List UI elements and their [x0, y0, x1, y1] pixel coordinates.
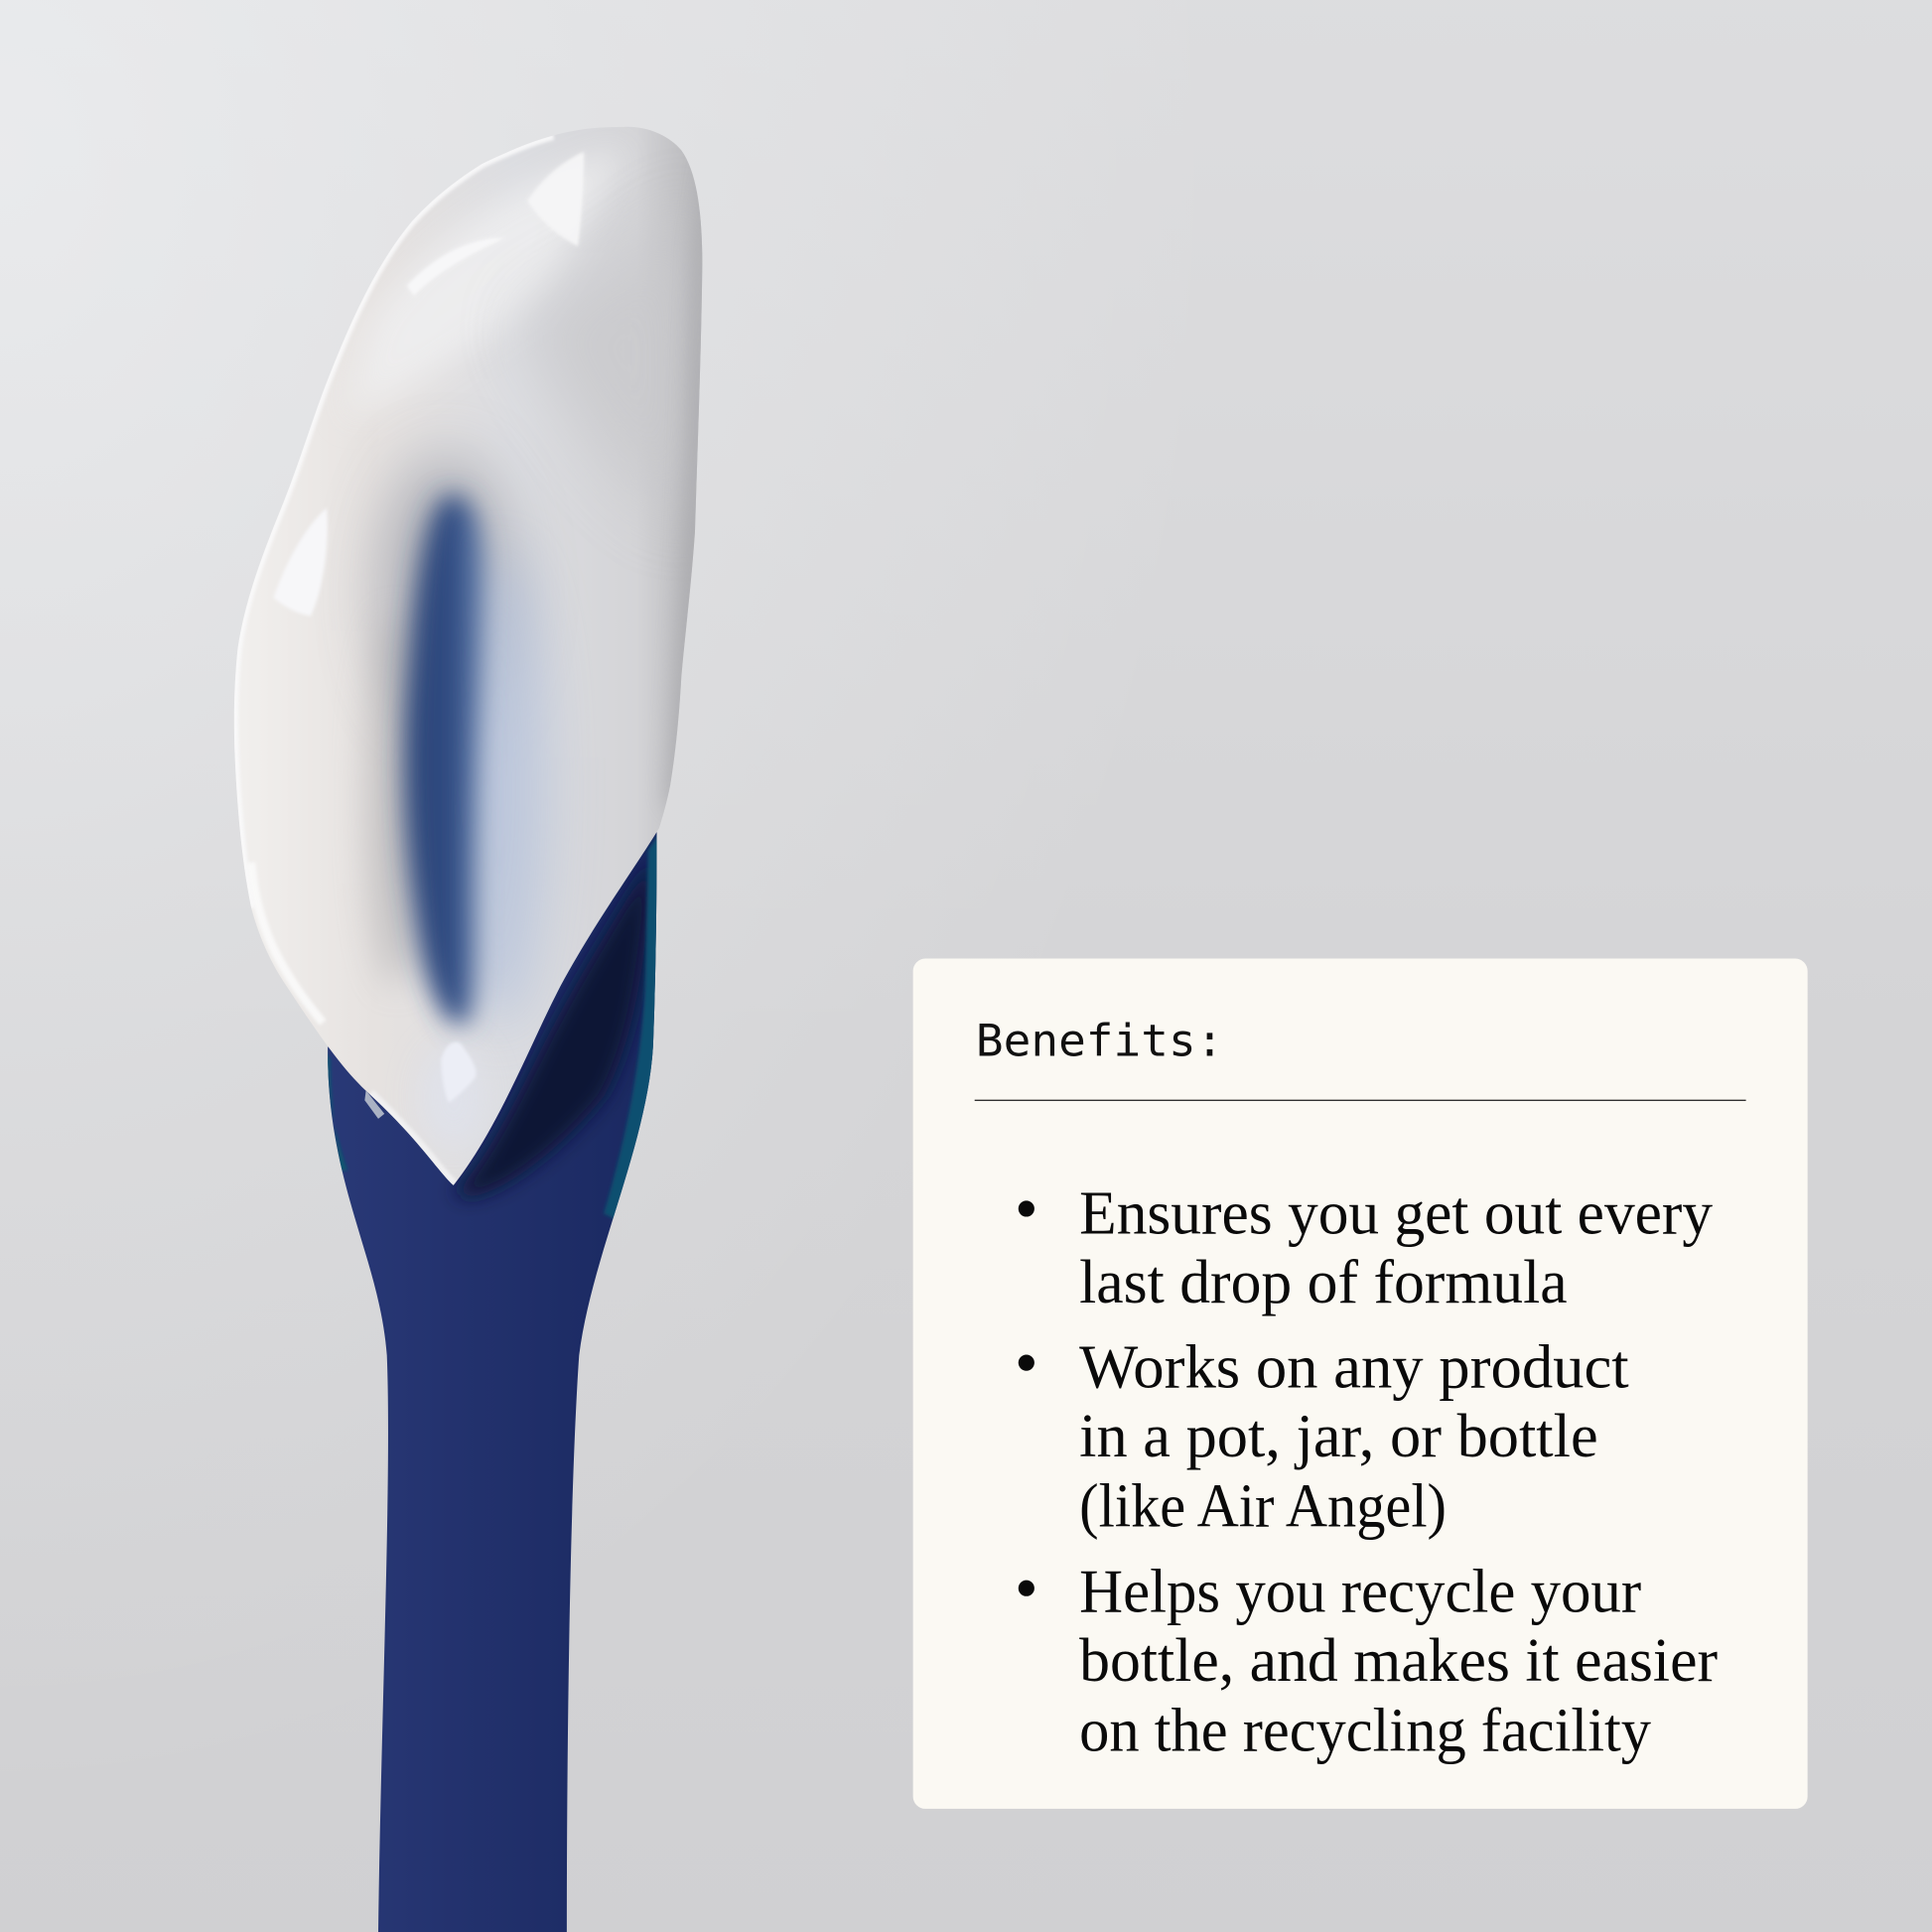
pale tip glow	[434, 1076, 490, 1139]
benefit 3: bottle, and makes it easier	[1079, 1627, 1718, 1695]
benefit 1	[1019, 1179, 1713, 1316]
benefit 1: Ensures you get out every	[1079, 1179, 1713, 1247]
spatula handle	[328, 832, 657, 1932]
formula blob on spatula	[234, 127, 709, 1185]
grey shade upper right	[536, 279, 640, 445]
specular on handle	[364, 1090, 384, 1119]
pale rim lower edge	[369, 1094, 454, 1185]
benefit 2: in a pot, jar, or bottle	[1079, 1403, 1598, 1470]
highlight: top triangle	[527, 152, 584, 246]
right edge shade	[663, 230, 702, 801]
benefit 2: Works on any product	[1079, 1333, 1629, 1401]
highlight: left patch	[274, 507, 328, 617]
blue glow right of streak	[452, 548, 546, 1029]
benefit 2	[1019, 1333, 1629, 1541]
benefit 3: Helps you recycle your	[1079, 1558, 1641, 1625]
glossy rim	[234, 136, 553, 908]
blue streak	[403, 494, 483, 1026]
benefits card	[913, 959, 1808, 1809]
benefit 1: last drop of formula	[1079, 1249, 1568, 1316]
highlight: upper arc	[407, 237, 505, 296]
grey halo around streak	[382, 456, 510, 727]
benefit 3: on the recycling facility	[1079, 1698, 1651, 1765]
soft white top left	[363, 156, 615, 397]
card heading: Benefits:	[976, 1016, 1223, 1067]
highlight: tip	[441, 1042, 477, 1103]
benefit 2: (like Air Angel)	[1079, 1473, 1447, 1541]
benefit 3	[1019, 1558, 1718, 1765]
heading rule	[975, 1100, 1746, 1101]
shadow under the formula	[454, 850, 655, 1196]
teal rim left	[328, 1052, 347, 1172]
teal rim right	[604, 832, 660, 1220]
